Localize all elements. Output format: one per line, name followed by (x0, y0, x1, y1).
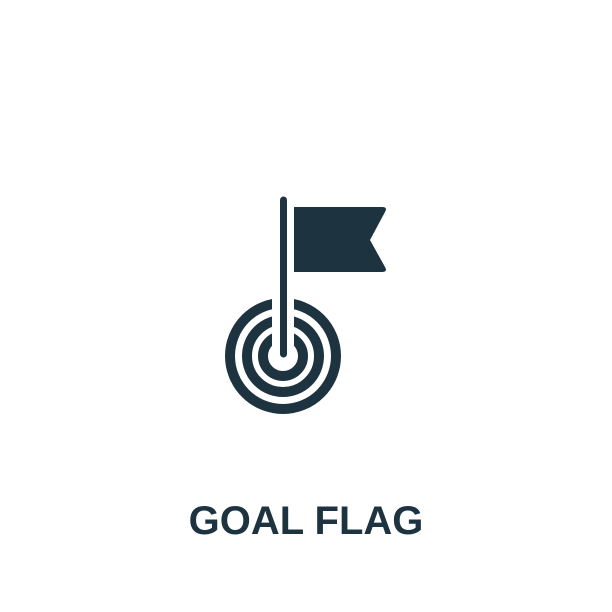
icon: goal flag (225, 196, 386, 414)
target rings (230, 303, 336, 409)
flag pole (280, 200, 287, 354)
flag (294, 207, 386, 272)
title: GOAL FLAG (189, 499, 423, 543)
